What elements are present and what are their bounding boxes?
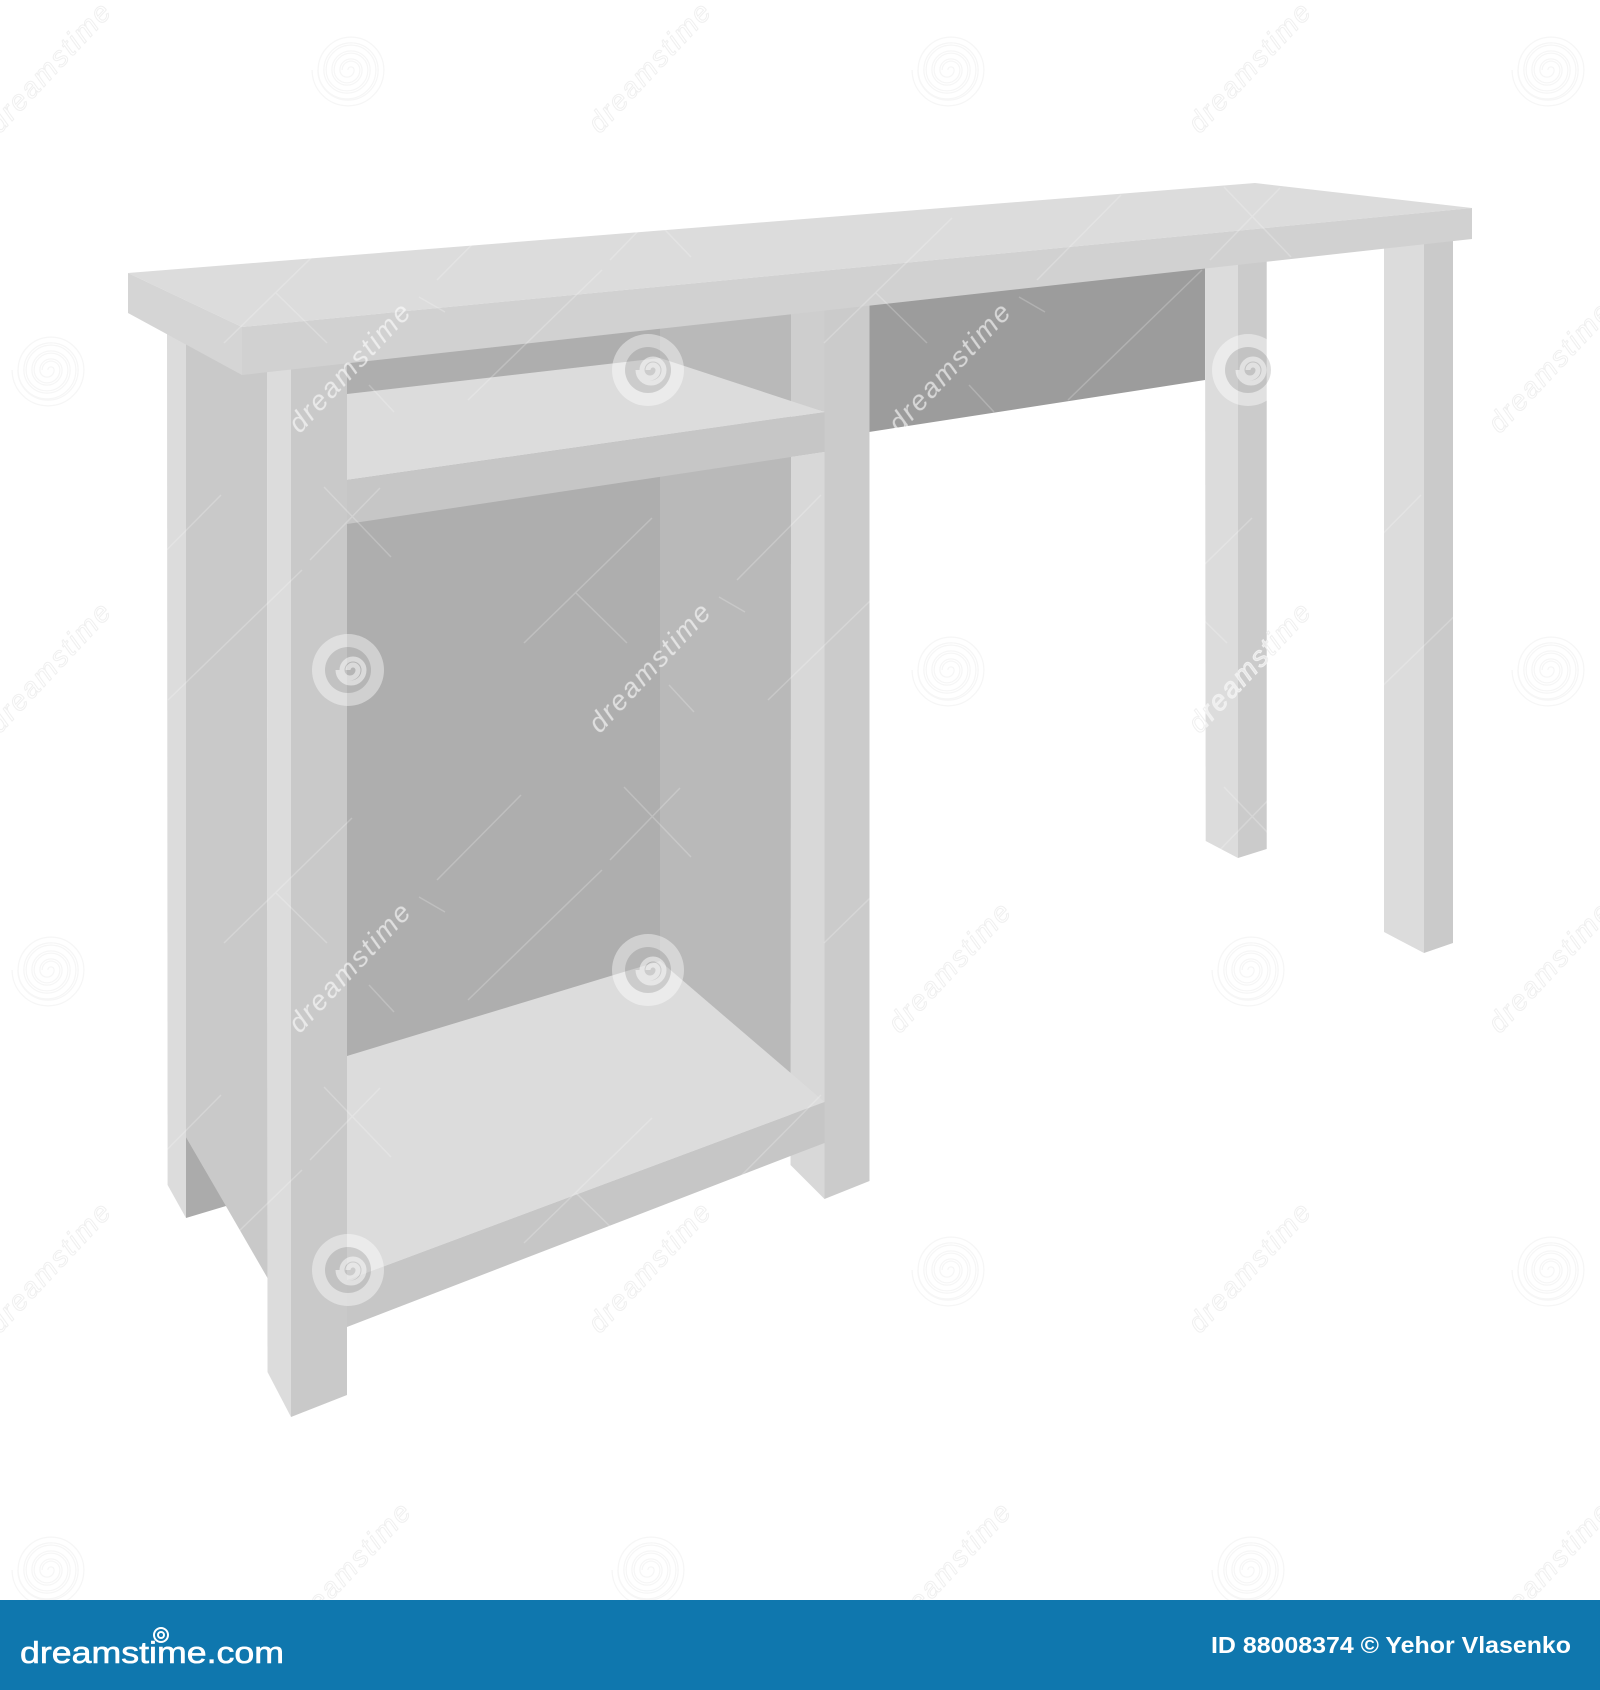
desk [128, 183, 1472, 1417]
inner back panel [347, 320, 660, 1060]
watermark text on white: dreamstime [1181, 597, 1317, 738]
watermark text on white: dreamstime [581, 0, 717, 138]
lower shelf [347, 961, 824, 1327]
middle post [790, 300, 870, 1199]
watermark text on white: dreamstime [581, 1197, 717, 1338]
logo wordmark: dreamstime.com [20, 1635, 284, 1670]
back right leg [1205, 252, 1267, 858]
upper shelf [347, 358, 824, 524]
watermark text on white: dreamstime [881, 897, 1017, 1038]
watermark text on desk: dreamstime [581, 597, 717, 738]
dark modesty panel [869, 262, 1205, 432]
watermark diagonal lines [0, 187, 1591, 1312]
tabletop [128, 183, 1472, 375]
watermark text on desk: dreamstime [281, 897, 417, 1038]
watermark text on white: dreamstime [1181, 0, 1317, 138]
logo spiral [154, 1628, 168, 1642]
far right leg [1384, 226, 1453, 953]
footer banner [0, 1600, 1600, 1690]
watermark text on desk: dreamstime [881, 297, 1017, 438]
watermark text on desk [281, 297, 1017, 1038]
watermark text on desk: dreamstime [281, 297, 417, 438]
watermark text on white: dreamstime [281, 1497, 417, 1638]
left side panel [167, 325, 268, 1278]
image id and author: ID 88008374 © Yehor Vlasenko [1211, 1632, 1571, 1658]
watermark text on white: dreamstime [881, 1497, 1017, 1638]
watermark text on white: dreamstime [1181, 1197, 1317, 1338]
front post [267, 355, 347, 1417]
inner side panel [660, 300, 791, 1110]
